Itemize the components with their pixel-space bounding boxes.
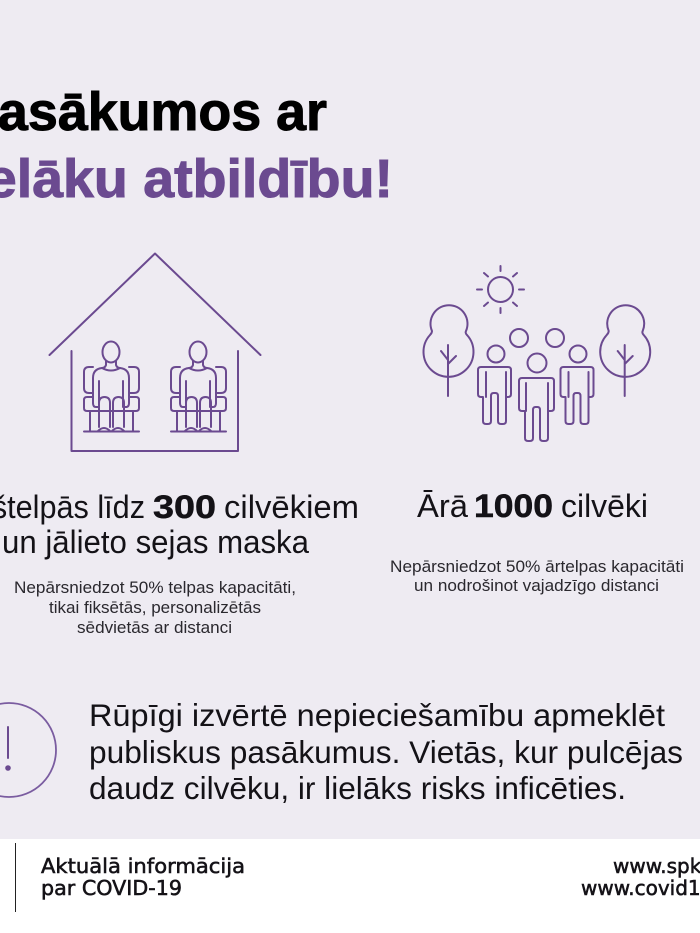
footer: Aktuālā informācija [41,854,245,878]
warning text: Rūpīgi izvērtē nepieciešamību apmeklēt [89,697,665,733]
outdoor heading: 1000 [474,488,553,524]
outdoor heading [417,488,648,524]
outdoor heading: cilvēki [561,488,648,524]
title [0,82,393,209]
outdoor heading: Ārā [417,488,468,524]
indoor heading: cilvēkiem [224,489,359,525]
outdoor note [390,558,684,595]
warning text [89,697,683,806]
footer: par COVID-19 [41,876,182,900]
warning text: publiskus pasākumus. Vietās, kur pulcējas [89,734,683,770]
indoor note [14,579,296,637]
indoor heading: 300 [153,489,216,525]
outdoor note: Nepārsniedzot 50% ārtelpas kapacitāti [390,558,684,576]
indoor heading [0,489,359,560]
outdoor note: un nodrošinot vajadzīgo distanci [414,577,659,595]
indoor note: Nepārsniedzot 50% telpas kapacitāti, [14,579,296,597]
indoor note: tikai fiksētās, personalizētās [49,599,261,617]
icon: house with seated people [50,254,260,451]
warning text: daudz cilvēku, ir lielāks risks inficēties. [89,770,626,806]
indoor note: sēdvietās ar distanci [77,619,232,637]
icon: warning circle [0,703,56,797]
icon: outdoor crowd with sun and trees [423,266,650,441]
indoor heading: un jālieto sejas maska [2,524,309,560]
footer [0,839,700,933]
